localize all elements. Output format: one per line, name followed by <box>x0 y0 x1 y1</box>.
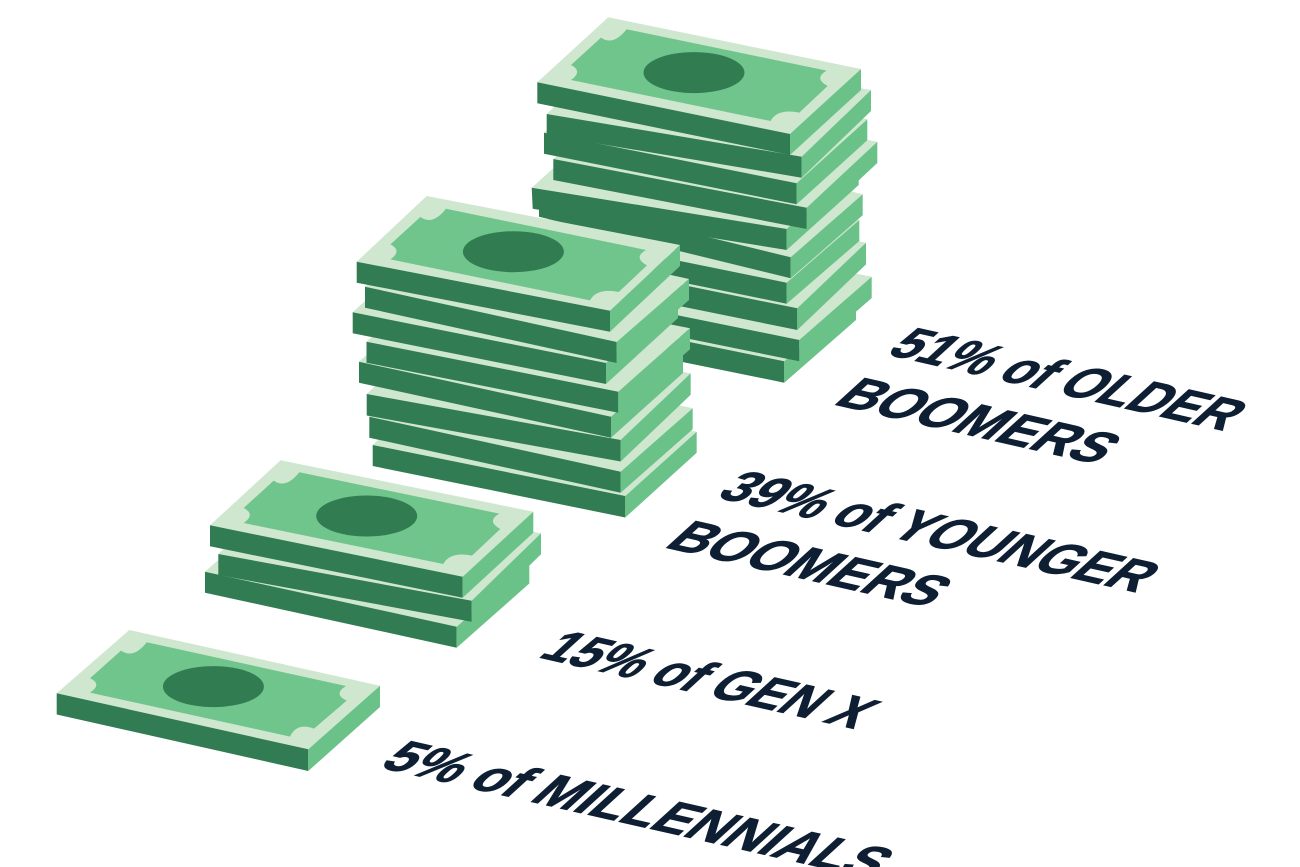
bill 2 <box>365 224 689 363</box>
bill 3 <box>353 246 678 384</box>
label: gen x: 15% of GEN X <box>527 622 892 738</box>
bill 10 <box>532 247 856 383</box>
bill 4 <box>553 93 877 229</box>
stack: older boomers money pile <box>532 17 877 383</box>
bill 8 <box>545 191 866 330</box>
stack: gen x money pile <box>205 460 541 648</box>
bill 2 <box>547 47 871 178</box>
bill 3 <box>544 69 867 204</box>
label: younger boomers: BOOMERS <box>653 512 966 616</box>
top bill <box>357 196 680 332</box>
bill 2 <box>218 487 541 622</box>
label: older boomers <box>822 319 1262 473</box>
top bill <box>210 460 533 598</box>
label: older boomers: BOOMERS <box>822 369 1135 473</box>
stack: millennials single bill <box>57 630 380 771</box>
bill 3 <box>205 508 529 648</box>
bill 6 <box>367 327 691 462</box>
stack: younger boomers money pile <box>353 196 697 518</box>
bill 5 <box>359 297 683 438</box>
top bill <box>537 17 861 155</box>
bill 8 <box>373 381 697 518</box>
bill 5 <box>532 123 859 250</box>
bill 7 <box>534 169 859 304</box>
bill 4 <box>366 278 690 413</box>
label: younger boomers: 39% of YOUNGER <box>705 462 1174 601</box>
bill 7 <box>369 353 693 493</box>
bill 9 <box>547 225 872 361</box>
bill 6 <box>539 133 863 278</box>
label: older boomers: 51% of OLDER <box>875 319 1262 439</box>
